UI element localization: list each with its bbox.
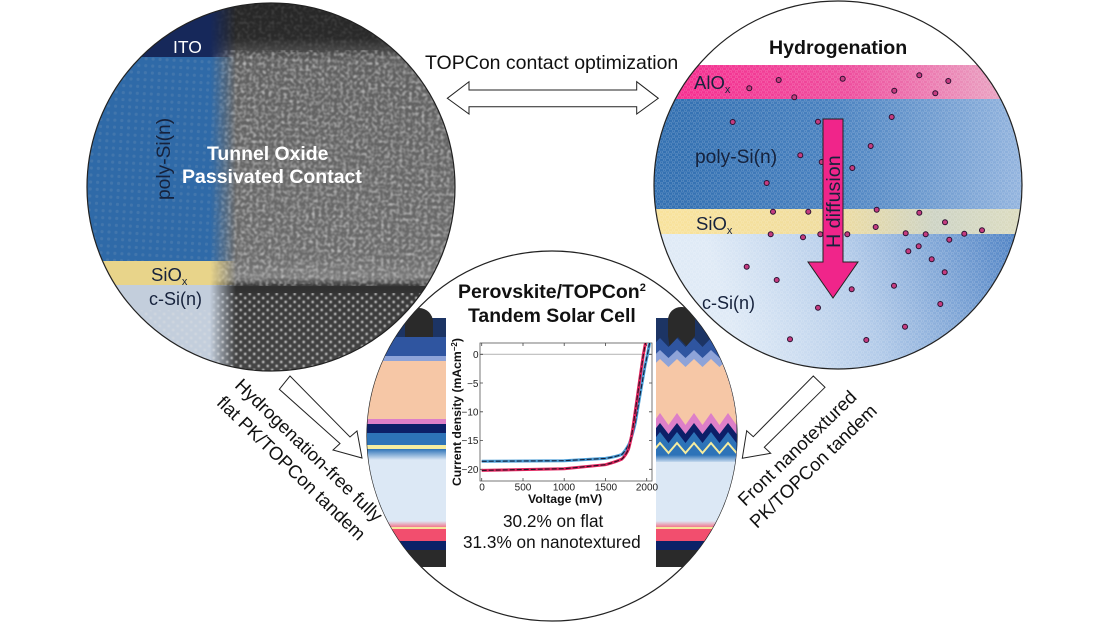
x tick labels: 2000 xyxy=(636,482,659,494)
label: poly-Si(n): poly-Si(n) xyxy=(154,118,175,200)
label: hydrogenation-free flat tandem: Hydrogenation-free fully xyxy=(231,374,387,526)
arrow: to nanotextured tandem xyxy=(742,376,825,458)
heading: tunnel oxide passivated contact: Tunnel Oxide xyxy=(207,143,329,165)
label: c-Si(n): c-Si(n) xyxy=(149,289,202,309)
arrow: to flat tandem xyxy=(279,376,362,458)
label: front nanotextured tandem: PK/TOPCon tandem xyxy=(745,400,881,532)
nanotextured tandem layer stack xyxy=(656,307,737,567)
y tick labels: −10 xyxy=(462,408,479,418)
x tick labels: 1000 xyxy=(553,482,576,494)
arrow: H diffusion xyxy=(808,119,858,298)
hydrogen atoms xyxy=(730,73,984,343)
heading: TOPCon contact optimization: TOPCon contact optimization xyxy=(425,52,678,74)
layer bands xyxy=(650,65,1030,375)
label: AlOx: AlO xyxy=(694,72,725,93)
heading: tunnel oxide passivated contact xyxy=(182,143,362,188)
y tick labels: −5 xyxy=(467,379,479,390)
label: SiOx: x xyxy=(727,225,733,237)
TEM micrograph xyxy=(211,4,454,370)
x tick labels: 500 xyxy=(515,482,532,494)
heading: hydrogenation: Hydrogenation xyxy=(769,37,907,59)
label: SiOx: SiO xyxy=(151,264,182,285)
panel: perovskite/TOPCon tandem circle xyxy=(360,251,746,621)
y tick labels xyxy=(462,350,479,476)
heading: tunnel oxide passivated contact: Passivated Contact xyxy=(182,166,362,188)
x tick labels: 0 xyxy=(479,482,485,494)
flat curve xyxy=(482,343,650,461)
arrow: double-headed xyxy=(447,82,658,114)
heading: tandem solar cell xyxy=(458,281,646,327)
y tick labels: 0 xyxy=(473,350,479,361)
nanotextured curve xyxy=(482,343,646,470)
heading: tandem solar cell: Perovskite/TOPCon xyxy=(458,281,640,303)
x tick labels: 1500 xyxy=(595,482,618,494)
chart: current density vs voltage xyxy=(450,338,659,506)
y axis title: Current density (mAcm xyxy=(450,351,464,486)
label: c-Si(n): c-Si(n) xyxy=(702,293,755,313)
label: AlOx: x xyxy=(725,84,731,96)
x tick labels xyxy=(479,482,659,494)
panel: tunnel oxide passivated contact circle xyxy=(80,0,460,383)
heading: tandem solar cell: 2 xyxy=(640,282,646,294)
label: poly-Si(n): poly-Si(n) xyxy=(695,147,777,168)
coloured layer overlay xyxy=(88,8,234,366)
y tick labels: −20 xyxy=(462,465,479,476)
flat tandem layer stack xyxy=(360,308,446,567)
heading: tandem solar cell: Tandem Solar Cell xyxy=(468,305,636,327)
panel: hydrogenation circle xyxy=(650,1,1030,375)
label: hydrogenation-free flat tandem: flat PK/TOPCon tandem xyxy=(213,392,370,544)
label: SiOx: SiO xyxy=(696,213,727,234)
y axis title: ) xyxy=(450,338,464,342)
y tick labels: −15 xyxy=(462,436,479,447)
y axis title: −2 xyxy=(450,342,459,351)
label: front nanotextured tandem: Front nanotextured xyxy=(733,386,861,510)
efficiency text: 30.2% on flat xyxy=(503,511,604,531)
efficiency text xyxy=(463,511,641,552)
efficiency text: 31.3% on nanotextured xyxy=(463,532,641,552)
x axis title: Voltage (mV) xyxy=(528,492,602,506)
label: SiOx: x xyxy=(182,276,188,288)
label: ITO: ITO xyxy=(173,37,202,57)
label: H diffusion: H diffusion xyxy=(823,155,845,248)
